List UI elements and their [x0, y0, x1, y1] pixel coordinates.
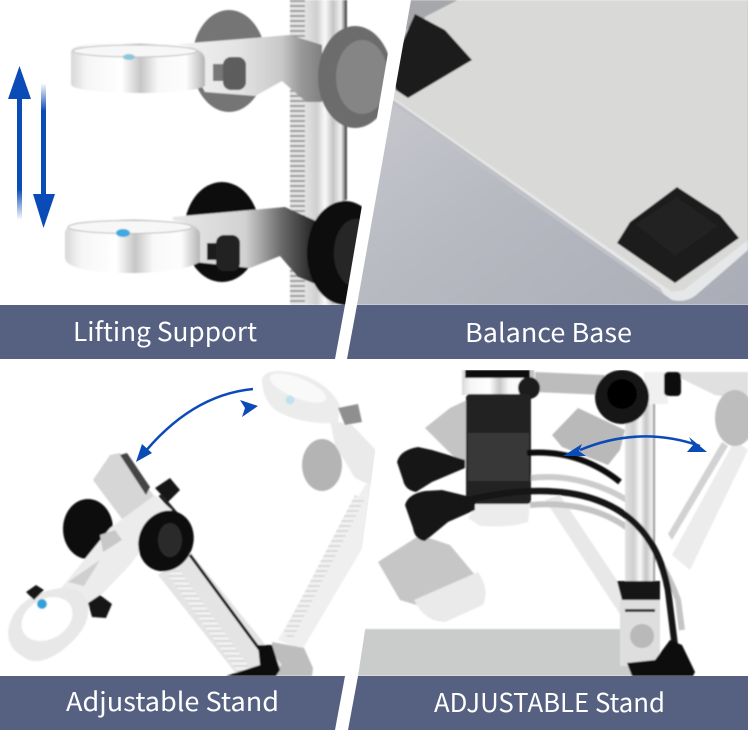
caption bar: ADJUSTABLE stand: [348, 676, 748, 730]
ring side knob: [88, 595, 112, 618]
lamp head upper: [397, 447, 465, 492]
small knob: [664, 372, 681, 396]
camera body: [466, 394, 531, 504]
icon: up arrow: [8, 66, 31, 220]
small top knob: [154, 477, 181, 513]
camera white tip: [468, 504, 530, 526]
lower bracket, black knobs: [65, 182, 383, 305]
gooseneck lower: [472, 491, 676, 655]
panel: balance base: [340, 0, 750, 359]
rack and column: [290, 0, 347, 305]
lamp head lower: [405, 490, 475, 541]
caption bar: adjustable stand: Adjustable Stand: [66, 682, 279, 719]
panel: lifting support: [0, 0, 392, 359]
support column: [625, 372, 668, 585]
bracket arm: [58, 495, 172, 612]
caption bar: balance base: Balance Base: [465, 313, 632, 350]
bracket arm: [535, 372, 605, 395]
column base: [617, 581, 660, 666]
lower column: [158, 552, 282, 676]
top ring and screw: [462, 370, 540, 399]
ghost stand position: [262, 371, 376, 676]
caption bar: ADJUSTABLE stand: ADJUSTABLE Stand: [434, 683, 665, 720]
black disc behind arm: [63, 499, 113, 559]
panel: ADJUSTABLE stand: [348, 370, 750, 730]
lamp foot: [627, 640, 695, 676]
caption bar: balance base: [347, 305, 748, 359]
caption bar: lifting support: [0, 305, 345, 359]
rubber foot, front: [617, 187, 739, 283]
curved arrow: [136, 389, 258, 462]
black knob: [595, 370, 649, 424]
base plate: [392, 0, 748, 301]
icon: down arrow: [33, 83, 55, 228]
top rail: [93, 453, 155, 519]
gooseneck upper: [527, 453, 620, 482]
table surface: [350, 629, 640, 676]
ghost positions: [378, 372, 750, 630]
rubber foot, rear: [390, 14, 472, 98]
main knob: [137, 510, 195, 572]
microscope ring: [8, 585, 88, 661]
caption bar: adjustable stand: [0, 676, 345, 730]
double arrow: [563, 436, 707, 456]
upper bracket, faded position: [71, 10, 392, 128]
caption bar: lifting support: Lifting Support: [73, 312, 257, 349]
panel: adjustable stand: [0, 367, 395, 730]
